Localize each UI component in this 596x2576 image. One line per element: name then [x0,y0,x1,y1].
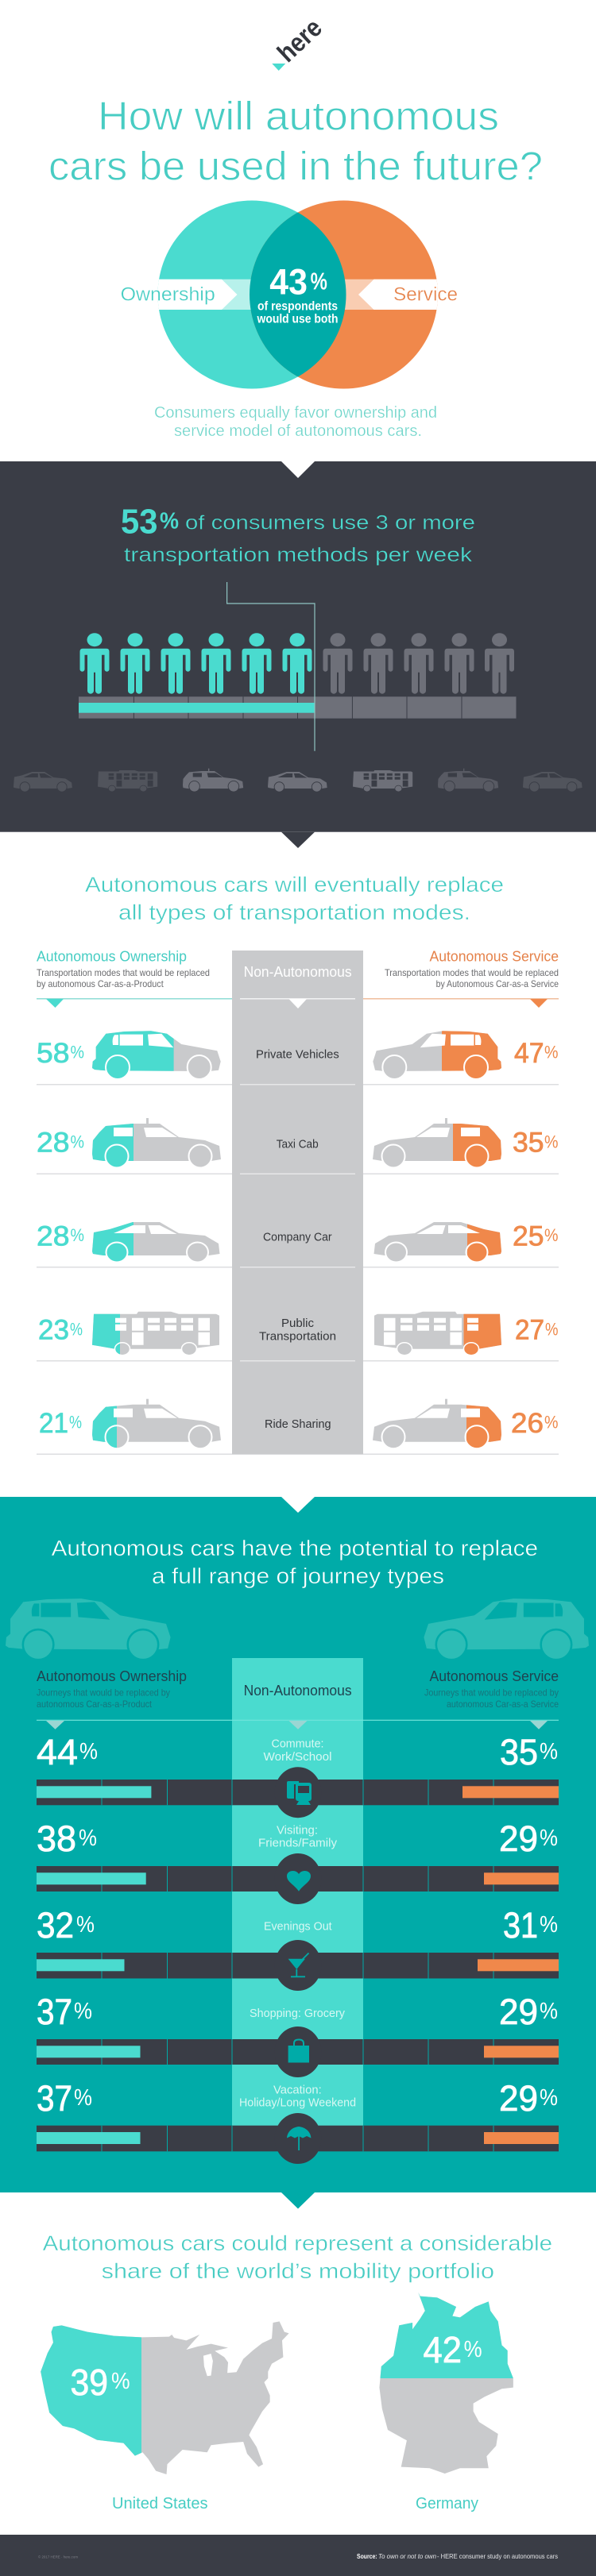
map: united states: United States [112,2495,208,2512]
row: taxi cab: 28 [37,1128,70,1159]
header: autonomous ownership [37,1668,187,1710]
row: commute [37,1732,559,1818]
footer [0,2535,596,2576]
heading: mobility portfolio: share of the world’s mobility portfolio [102,2259,494,2283]
subtitle text: service model of autonomous cars. [174,422,422,440]
row: taxi cab: % [70,1132,84,1151]
header: autonomous service: Autonomous Service [429,949,559,965]
row: shopping [37,1992,559,2077]
header: autonomous ownership: autonomous Car-as-a-Product [37,1699,153,1710]
row: shopping: % [74,1999,92,2024]
row: evenings out [37,1905,559,1991]
row: vacation: Holiday/Long Weekend [239,2096,356,2110]
row: private vehicles: % [544,1043,558,1062]
heading: 53% of consumers: of consumers use 3 or more [185,512,475,534]
heading: journey types [52,1536,538,1588]
heading: mobility portfolio [43,2231,552,2283]
row: private vehicles: 47 [514,1038,544,1069]
row: visiting [37,1818,559,1904]
row: commute: Work/School [264,1750,332,1764]
row: shopping: 37 [37,1992,72,2032]
row: evenings out: 31 [503,1905,538,1945]
row: ride sharing: % [544,1413,558,1433]
row: taxi cab [37,1118,558,1167]
heading: 53% of consumers: transportation methods per week [124,544,473,566]
venn diagram: ownership and service: % [311,269,327,295]
header: autonomous service [424,1668,559,1710]
title: cars be used in the future? [48,144,543,189]
heading: 53% of consumers: 53 [121,503,157,542]
row: taxi cab: 35 [513,1128,544,1159]
icon: taxi hatch, service [373,1399,501,1448]
icon: martini [288,1953,308,1976]
row: company car: 28 [37,1221,70,1251]
icon: bus, service [374,1312,501,1355]
row: visiting: 29 [499,1818,538,1859]
row: public transportation: % [545,1319,558,1339]
map: germany: % [464,2337,482,2362]
icon: umbrella [287,2127,311,2150]
panel: journey types [0,1497,596,2209]
venn diagram: ownership and service [121,200,458,389]
row: public transportation: 23 [38,1315,69,1346]
row: vacation: % [540,2085,558,2111]
header: autonomous service: autonomous Car-as-a Service [447,1699,559,1710]
row: private vehicles: % [70,1043,84,1062]
header: autonomous ownership [37,949,232,1008]
center column [232,1658,363,2127]
row: visiting: Visiting: [277,1823,318,1837]
row: visiting: % [540,1826,558,1851]
row: evenings out: Evenings Out [264,1920,332,1934]
row: vacation: 37 [37,2078,72,2119]
heading: journey types: a full range of journey types [152,1564,444,1588]
title: How will autonomous [98,94,499,138]
venn diagram: ownership and service: Ownership [121,283,215,305]
row: public transportation [38,1312,558,1355]
row: commute: 35 [500,1732,538,1772]
heading: 53% of consumers: % [160,509,179,534]
row: evenings out: % [540,1912,558,1938]
icon: private car, ownership [92,1031,221,1079]
row: company car: 25 [513,1221,544,1251]
row: public transportation: Public [281,1317,314,1330]
row: private vehicles: Private Vehicles [256,1048,339,1062]
header: autonomous service: Autonomous Service [429,1668,559,1684]
subtitle text: Consumers equally favor ownership and [154,404,437,422]
vehicle icons row [14,769,582,792]
row: vacation: % [74,2085,92,2111]
icon: private car, service [373,1031,501,1079]
icon: bus, ownership [92,1312,219,1355]
map: germany [379,2293,513,2512]
header: non-autonomous: Non-Autonomous [244,1683,352,1699]
row: commute: % [79,1739,98,1764]
connector line [227,582,315,751]
map: united states [41,2321,289,2512]
icon: bus and train [287,1781,312,1805]
header: autonomous ownership: Autonomous Ownership [37,1668,187,1684]
header: autonomous service: Transportation modes that would be replaced [385,967,559,978]
title [48,94,543,189]
footer: Source: [357,2552,377,2560]
header: autonomous service: by Autonomous Car-as-a Service [436,978,559,989]
row: visiting: 38 [37,1818,76,1859]
icon: sedan, service [373,1222,501,1263]
row: public transportation: Transportation [259,1329,336,1343]
row: company car: Company Car [263,1231,332,1244]
bar: share of consumers [79,696,517,719]
panel: non-autonomous column: Non-Autonomous [244,964,352,980]
icon: shopping bag [288,2039,309,2063]
row: commute: % [540,1739,558,1764]
row: vacation [37,2078,559,2164]
row: ride sharing: 26 [511,1408,544,1439]
venn diagram: ownership and service: of respondents [257,300,338,314]
row: visiting: % [79,1826,97,1851]
row: visiting: Friends/Family [258,1837,337,1850]
icon: taxi hatch, ownership [92,1399,221,1448]
row: taxi cab: Taxi Cab [277,1138,319,1151]
row: company car [37,1221,558,1263]
venn diagram: ownership and service: would use both [257,313,339,326]
row: commute: Commute: [272,1737,324,1751]
logo: HERE: here [272,13,327,67]
venn diagram: ownership and service: Service [393,283,458,305]
header line with markers [37,1720,559,1730]
row: evenings out: 32 [37,1905,74,1945]
footer: To own or not to own [378,2552,436,2560]
icon: taxi, ownership [92,1118,221,1167]
header: autonomous ownership: Transportation modes that would be replaced [37,967,210,978]
heading: replace transportation modes: Autonomous cars will eventually replace [85,873,504,897]
icon: taxi, service [373,1118,501,1167]
row: ride sharing: 21 [39,1408,68,1439]
footer: - HERE consumer study on autonomous cars [437,2552,558,2560]
row: private vehicles: 58 [37,1038,70,1069]
icon: ghost car right [424,1598,589,1660]
row: shopping: 29 [499,1992,538,2032]
header: autonomous service [363,949,559,1008]
row: public transportation: % [70,1319,83,1339]
footer: © 2017 HERE · here.com [38,2555,78,2559]
header: autonomous service: Journeys that would be replaced by [424,1687,559,1699]
row: vacation: 29 [499,2078,538,2119]
row: public transportation: 27 [515,1315,544,1346]
row: taxi cab: % [544,1132,558,1151]
row: shopping: % [540,1999,558,2024]
header: autonomous ownership: Autonomous Ownership [37,949,187,965]
panel: transportation methods [0,461,596,848]
row: company car: % [70,1225,84,1245]
row: ride sharing: Ride Sharing [265,1417,331,1431]
row: ride sharing: % [69,1413,82,1433]
map: united states: 39 [70,2362,108,2403]
icon: heart [287,1871,311,1892]
row: commute: 44 [37,1732,78,1772]
row: ride sharing [39,1399,558,1448]
row: company car: % [544,1225,558,1245]
map: germany: 42 [423,2329,462,2370]
icon: sedan, ownership [92,1222,219,1263]
subtitle text [154,404,437,440]
row: vacation: Vacation: [273,2084,322,2097]
heading: journey types: Autonomous cars have the potential to replace [52,1536,538,1560]
heading: mobility portfolio: Autonomous cars could represent a considerable [43,2231,552,2255]
panel: non-autonomous column [232,951,363,1455]
row dividers [37,1085,559,1454]
heading: replace transportation modes: all types of transportation modes. [118,900,470,924]
icon: ghost car left [6,1598,171,1660]
header: autonomous ownership: by autonomous Car-as-a-Product [37,978,164,989]
row: shopping: Shopping: Grocery [250,2007,345,2020]
header: autonomous ownership: Journeys that would be replaced by [37,1687,170,1699]
people icons: 6 highlighted of 11 [79,633,514,694]
row: evenings out: % [76,1912,95,1938]
heading: 53% of consumers [121,503,475,566]
heading: replace transportation modes [85,873,504,924]
venn diagram: ownership and service: 43 [269,262,308,303]
map: united states: % [111,2369,130,2394]
map: germany: Germany [416,2495,478,2512]
row: private vehicles [37,1031,558,1079]
